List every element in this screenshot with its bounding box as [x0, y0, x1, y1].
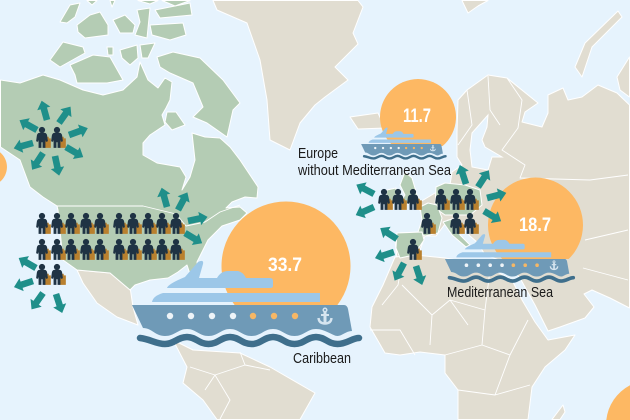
value: 11.7: 11.7 — [403, 106, 431, 127]
ship: Caribbean — [132, 261, 359, 344]
Novaya Zemlya — [575, 11, 622, 77]
ship: Mediterranean — [445, 234, 573, 281]
arrows: northern Europe — [353, 163, 508, 227]
Iceland — [350, 113, 385, 129]
label: Europe without Mediterranean Sea: without Mediterranean Sea — [297, 163, 452, 179]
arrows: Canada — [12, 99, 90, 177]
label: Europe without Mediterranean Sea: Europe — [298, 146, 338, 162]
South America — [173, 340, 315, 420]
value: 33.7: 33.7 — [268, 255, 302, 276]
Madagascar — [552, 405, 565, 420]
passengers: Canada — [36, 127, 66, 148]
passengers: Europe — [378, 189, 479, 260]
Greenland — [213, 0, 363, 150]
Baffin Island — [157, 52, 240, 137]
arrows: western United States — [12, 252, 69, 315]
Yamal — [617, 57, 630, 97]
Svalbard — [462, 0, 488, 13]
passengers: United States — [36, 213, 185, 285]
label: Europe without Mediterranean Sea — [297, 146, 452, 179]
European Union green — [385, 172, 482, 258]
North America green — [0, 62, 258, 290]
Caribbean bubble — [222, 202, 350, 305]
Baltic Sea — [470, 115, 502, 170]
Europe bubble — [380, 79, 456, 146]
Eurasia — [395, 75, 630, 331]
value: 18.7: 18.7 — [519, 214, 551, 236]
arrows: eastern United States — [155, 186, 209, 249]
label: Caribbean: Caribbean — [293, 351, 351, 367]
label: Mediterranean Sea: Mediterranean Sea — [447, 285, 554, 301]
Mexico — [77, 270, 138, 325]
bubble: partial left circle — [0, 152, 7, 182]
arrows: Spain — [373, 222, 429, 287]
bubble: bottom right circle — [606, 385, 630, 420]
ship: Europe — [361, 128, 446, 158]
Arctic islands — [50, 0, 192, 130]
Mediterranean bubble — [488, 178, 583, 259]
Africa — [370, 255, 575, 420]
